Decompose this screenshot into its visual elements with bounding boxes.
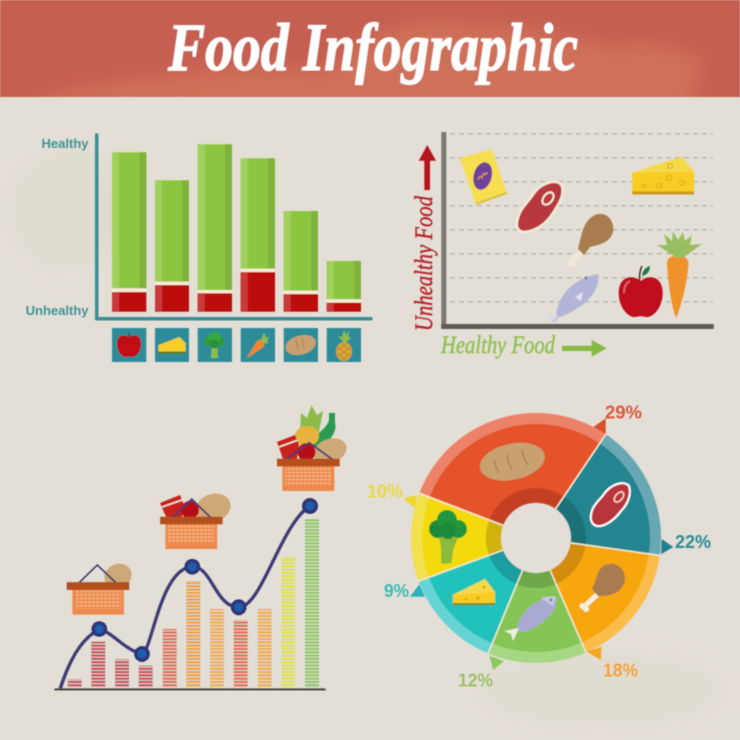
pointer triangles <box>403 418 673 670</box>
label: Unhealthy Food: Unhealthy Food <box>411 196 438 331</box>
food: apple <box>619 266 663 317</box>
food: chicken drumstick <box>568 214 613 266</box>
label: Unhealthy: Unhealthy <box>26 303 89 318</box>
food: book <box>460 149 507 205</box>
bar: bread <box>284 211 318 312</box>
icon: steak <box>591 483 630 526</box>
bar: cheese <box>155 180 189 312</box>
wedge: 22% <box>449 451 623 625</box>
bar: apple <box>112 152 146 312</box>
food: fish <box>544 274 598 322</box>
bar: carrot <box>241 158 275 312</box>
pie wedges <box>419 434 660 654</box>
panel: basket growth chart <box>56 406 350 690</box>
title: Food Infographic <box>167 9 578 85</box>
label: 12%: 12% <box>458 670 493 690</box>
trend line <box>61 506 310 687</box>
icon tile: apple <box>112 328 146 362</box>
label: 9%: 9% <box>384 581 409 601</box>
arrow: right <box>562 340 607 357</box>
grid lines <box>450 134 713 302</box>
wedge: 29% <box>455 457 617 619</box>
food: cheese <box>632 157 694 194</box>
arrow: up <box>419 145 436 190</box>
panel: healthy vs unhealthy bar chart <box>26 135 371 362</box>
panel: pie chart <box>367 402 711 690</box>
wedge: 18% <box>465 467 607 609</box>
panel: healthy vs unhealthy scatter chart <box>411 132 714 359</box>
icon: drumstick <box>580 564 625 612</box>
data points <box>91 498 318 662</box>
wedge: 10% <box>456 458 616 618</box>
basket: jar, apple and bread <box>160 489 235 549</box>
label: Healthy Food: Healthy Food <box>440 332 555 359</box>
label: Healthy: Healthy <box>42 136 89 151</box>
basket: bread only <box>67 559 136 615</box>
icon: bread <box>476 437 548 486</box>
wedge: 12% <box>454 456 618 620</box>
wedge: 9% <box>454 456 618 620</box>
chart axes <box>97 135 371 319</box>
label: 22%: 22% <box>675 532 711 552</box>
icon: cheese <box>453 579 495 605</box>
icon: broccoli <box>429 510 467 564</box>
icon tile: carrot <box>241 328 275 362</box>
basket: full groceries <box>277 406 350 491</box>
header banner <box>0 0 740 98</box>
icon tile: broccoli <box>198 328 232 362</box>
label: 29%: 29% <box>605 402 642 422</box>
icon tile: cheese <box>155 328 189 362</box>
icon tile: pineapple <box>327 328 361 362</box>
vertical axis <box>441 132 446 329</box>
horizontal axis <box>441 324 714 329</box>
icon: fish <box>504 596 556 641</box>
food: carrot <box>657 231 702 318</box>
baseline <box>56 688 324 692</box>
food: steak <box>517 182 563 232</box>
label: 10%: 10% <box>367 482 403 502</box>
label: 18%: 18% <box>603 660 638 680</box>
bar: pineapple <box>327 261 361 312</box>
stacked bars <box>67 515 320 688</box>
bar: broccoli <box>198 144 232 312</box>
icon tile: bread <box>283 328 318 362</box>
